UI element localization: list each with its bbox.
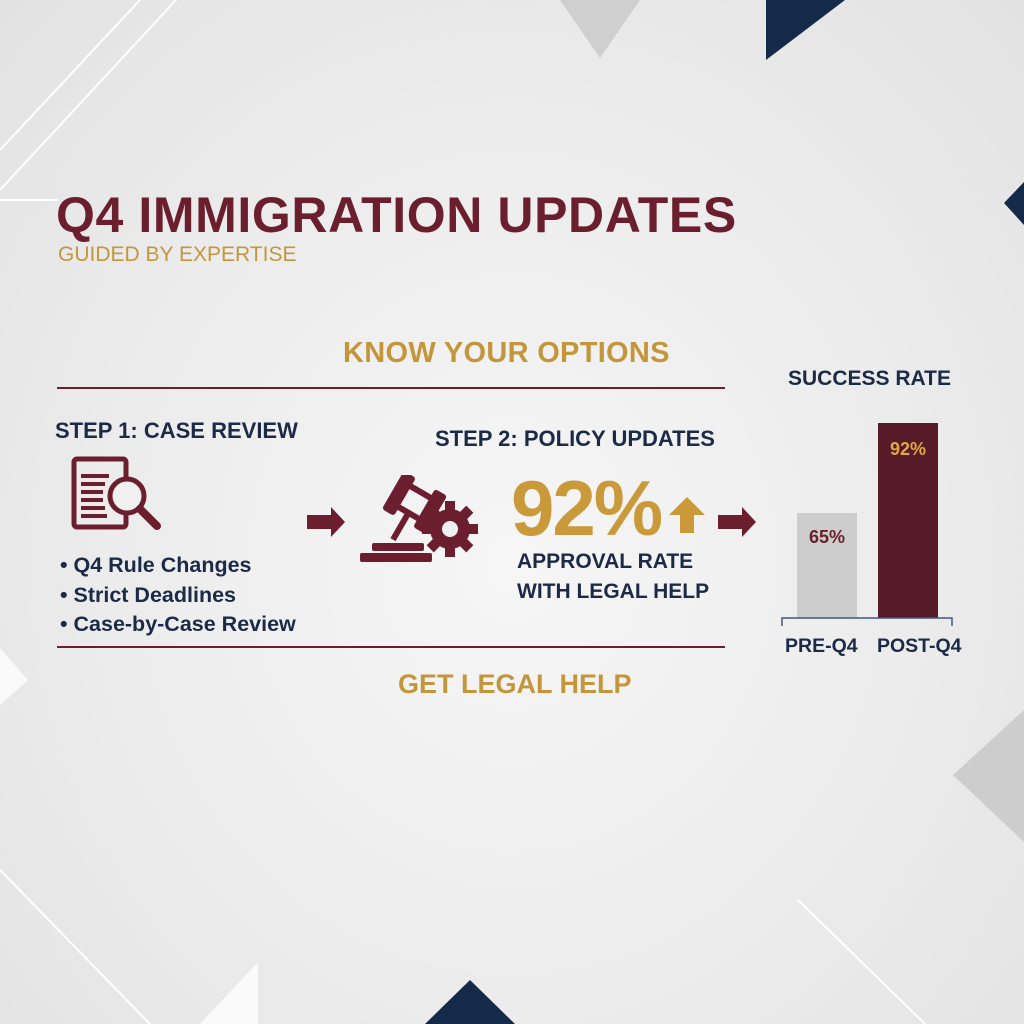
divider top [57, 387, 725, 389]
subtitle: GUIDED BY EXPERTISE [58, 243, 296, 266]
step 2 heading: STEP 2: POLICY UPDATES [435, 426, 715, 451]
stat: 92% approval: 92% [511, 464, 661, 552]
icon: up arrow [669, 497, 705, 533]
bar chart: success rate: 65% [809, 527, 845, 547]
heading: know your options: KNOW YOUR OPTIONS [343, 337, 670, 369]
panel: step 1 [55, 418, 298, 636]
bullet list [60, 553, 296, 636]
arrow 1 [307, 507, 345, 537]
heading: get legal help: GET LEGAL HELP [398, 669, 632, 699]
bar chart: success rate [781, 367, 962, 657]
bar chart: success rate: POST-Q4 [877, 635, 962, 657]
bullet list: • Case-by-Case Review [60, 612, 296, 636]
bullet list: • Strict Deadlines [60, 582, 236, 606]
arrow 2 [718, 507, 756, 537]
stat: 92% approval: WITH LEGAL HELP [517, 580, 709, 603]
step 1 heading: STEP 1: CASE REVIEW [55, 418, 298, 443]
bullet list: • Q4 Rule Changes [60, 553, 252, 577]
stat: 92% approval [511, 464, 709, 603]
icon: gavel and gear [360, 475, 478, 562]
bar chart: success rate: SUCCESS RATE [788, 367, 951, 390]
bar chart: success rate: PRE-Q4 [785, 635, 858, 657]
stat: 92% approval: APPROVAL RATE [517, 550, 693, 573]
icon: document with magnifier [72, 456, 161, 530]
divider bottom [57, 646, 725, 648]
title: Q4 IMMIGRATION UPDATES [56, 187, 737, 243]
bar chart: success rate: 92% [890, 439, 926, 459]
